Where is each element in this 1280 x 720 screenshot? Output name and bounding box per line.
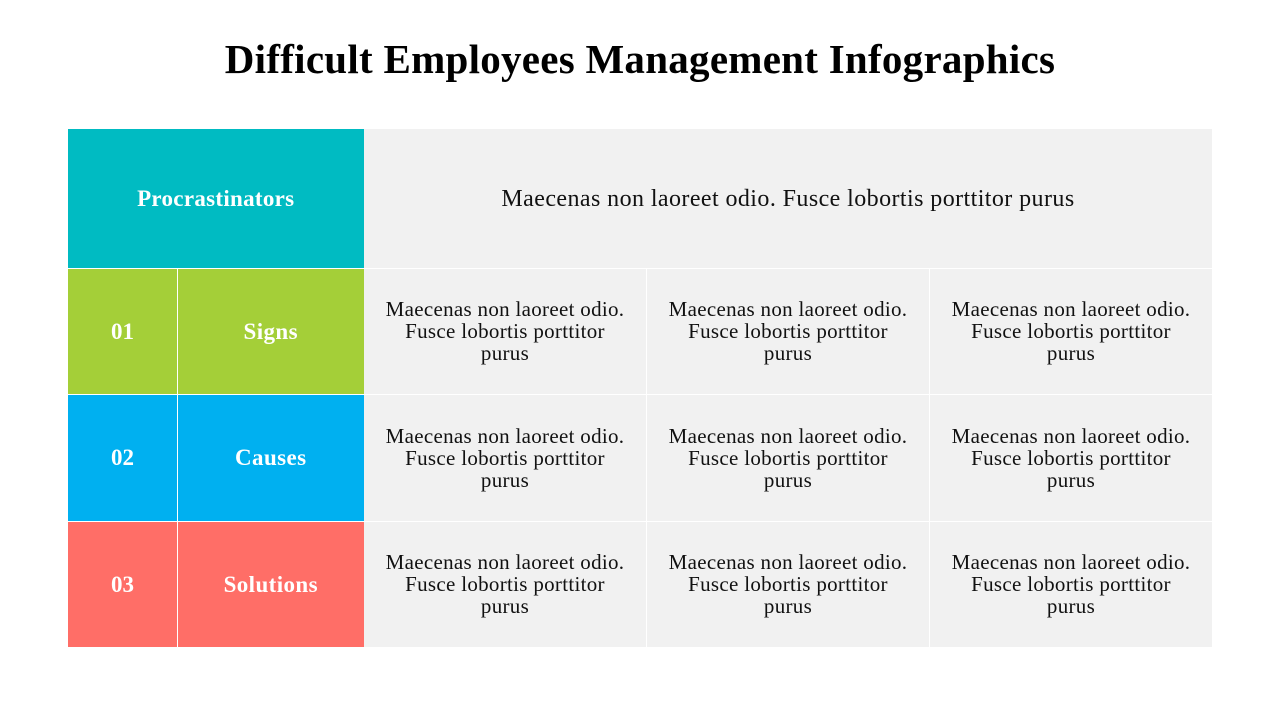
- row 03 text 1: Fusce lobortis porttitor: [405, 572, 605, 596]
- header: Procrastinators: [68, 129, 364, 268]
- row 03 number: 03: [111, 572, 134, 596]
- row 01 text 3: [930, 269, 1212, 394]
- row 03 number: [68, 522, 177, 647]
- row 01 text 2: [647, 269, 929, 394]
- row 02 number: [68, 395, 177, 521]
- row 03 text 2: [647, 522, 929, 647]
- row 01 label: Signs: Signs: [244, 318, 298, 344]
- header description: Maecenas non laoreet odio. Fusce lobortis porttitor purus: [501, 186, 1075, 212]
- row 03 text 2: Fusce lobortis porttitor: [688, 572, 888, 596]
- row 02 text 3: [930, 395, 1212, 521]
- row 02 text 3: Maecenas non laoreet odio.: [952, 424, 1190, 448]
- row 01 text 3: purus: [1047, 340, 1095, 364]
- row 03 text 3: Fusce lobortis porttitor: [971, 572, 1171, 596]
- row 01 text 1: purus: [481, 340, 529, 364]
- row 03 text 3: purus: [1047, 594, 1095, 618]
- row 01 text 1: Fusce lobortis porttitor: [405, 318, 605, 342]
- row 03 text 2: Maecenas non laoreet odio.: [669, 550, 907, 574]
- panel: table: [68, 129, 1212, 647]
- row 02 text 3: purus: [1047, 468, 1095, 492]
- row 02 text 2: purus: [764, 468, 812, 492]
- row 02 text 1: purus: [481, 468, 529, 492]
- row 01 text 1: [364, 269, 646, 394]
- title: Difficult Employees Management Infographics: [225, 36, 1055, 82]
- row 01 text 3: Maecenas non laoreet odio.: [952, 296, 1190, 320]
- row 02 text 1: Maecenas non laoreet odio.: [386, 424, 624, 448]
- row 02 text 1: Fusce lobortis porttitor: [405, 446, 605, 470]
- row 02 label: Causes: [178, 395, 364, 521]
- row 02 label: Causes: Causes: [235, 445, 306, 470]
- row 01 text 2: purus: [764, 340, 812, 364]
- row 01 text 2: Maecenas non laoreet odio.: [669, 296, 907, 320]
- row 01 label: Signs: [178, 269, 364, 394]
- row 03 text 2: purus: [764, 594, 812, 618]
- row 02 text 2: [647, 395, 929, 521]
- row 02 text 2: Maecenas non laoreet odio.: [669, 424, 907, 448]
- row 02 text 1: [364, 395, 646, 521]
- header: Procrastinators: Procrastinators: [137, 186, 294, 210]
- row 03 text 3: [930, 522, 1212, 647]
- row 01 text 2: Fusce lobortis porttitor: [688, 318, 888, 342]
- row 01 text 1: Maecenas non laoreet odio.: [386, 296, 624, 320]
- row 03 text 1: purus: [481, 594, 529, 618]
- row 03 label: Solutions: Solutions: [224, 572, 318, 596]
- row 03 text 1: [364, 522, 646, 647]
- row 03 label: Solutions: [178, 522, 364, 647]
- row 01 number: [68, 269, 177, 394]
- row 02 text 2: Fusce lobortis porttitor: [688, 446, 888, 470]
- row 03 text 1: Maecenas non laoreet odio.: [386, 550, 624, 574]
- row 01 number: 01: [111, 318, 134, 344]
- row 02 number: 02: [111, 445, 134, 470]
- header description: [364, 129, 1212, 268]
- row 02 text 3: Fusce lobortis porttitor: [971, 446, 1171, 470]
- row 01 text 3: Fusce lobortis porttitor: [971, 318, 1171, 342]
- row 03 text 3: Maecenas non laoreet odio.: [952, 550, 1190, 574]
